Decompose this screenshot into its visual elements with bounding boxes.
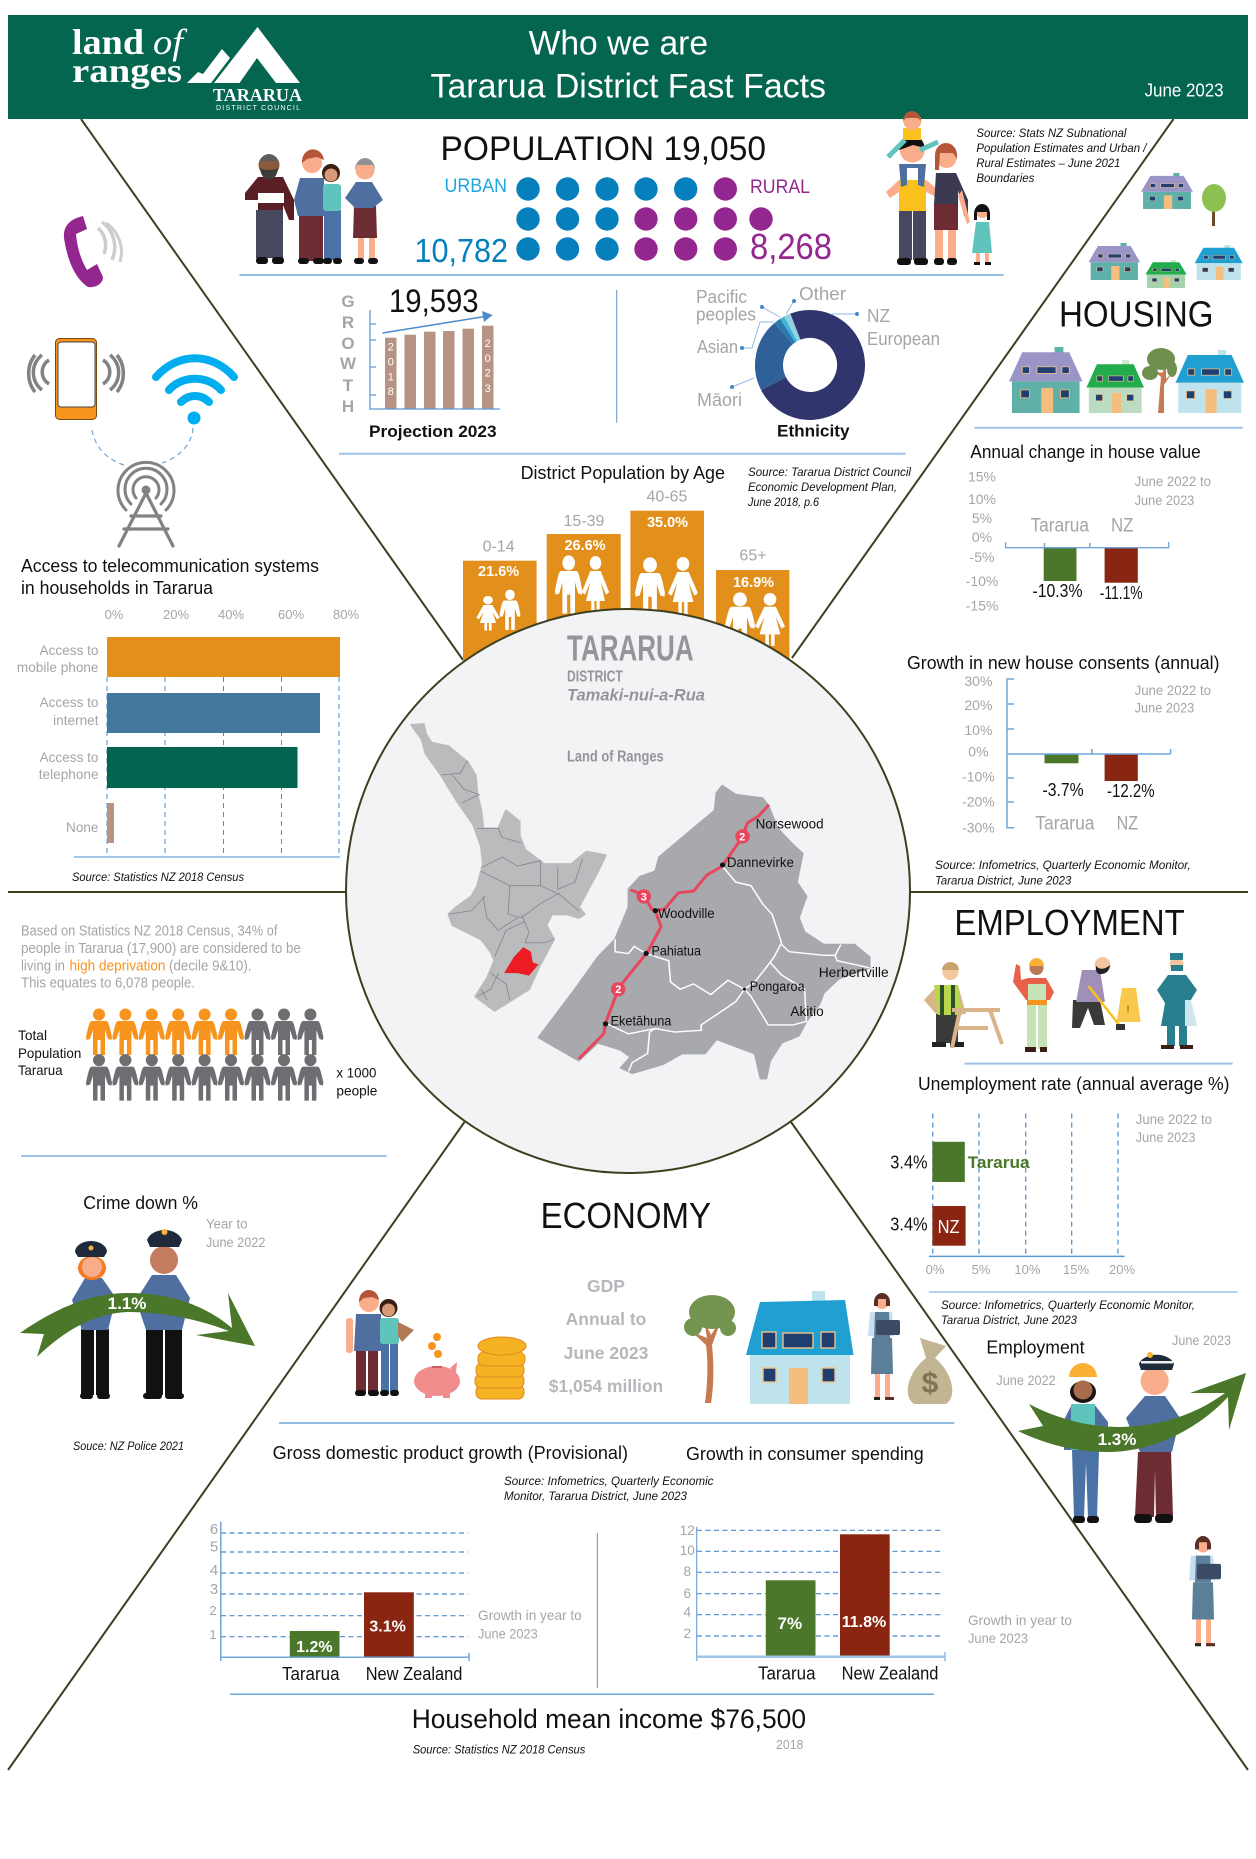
- gdp figure: June 2023: [564, 1343, 649, 1363]
- chart: consumer spending: 12: [680, 1523, 695, 1538]
- chart: consumer spending: Growth in year to: [968, 1612, 1072, 1628]
- vertical label growth: [340, 292, 357, 416]
- chart: growth in new house consents: NZ: [1117, 813, 1138, 834]
- chart: unemployment rate: 20%: [1109, 1262, 1135, 1277]
- caption: Ethnicity: [777, 422, 850, 441]
- projected number: 19,593: [389, 283, 479, 319]
- age percentages: 26.6%: [564, 538, 606, 554]
- chart: unemployment rate: NZ: [938, 1217, 960, 1237]
- chart: consumer spending: Tararua: [758, 1663, 816, 1683]
- chart: unemployment rate: 3.4%: [890, 1153, 928, 1173]
- labels: Māori: [697, 390, 742, 410]
- connection dashes: [92, 428, 193, 465]
- chart: growth in new house consents: -12.2%: [1107, 781, 1155, 801]
- chart: consumer spending: 11.8%: [842, 1614, 886, 1631]
- bars: [385, 326, 494, 409]
- town labels: Herbertville: [819, 964, 889, 980]
- chart: annual change in house value: Tararua: [1030, 516, 1089, 537]
- chart: annual change in house value: [966, 442, 1211, 614]
- title: Tararua District Fast Facts: [430, 68, 826, 106]
- logo: land of ranges: [72, 22, 302, 112]
- arrow: employment up: [1018, 1373, 1246, 1452]
- chart: annual change in house value: -5%: [970, 549, 994, 565]
- chart: annual change in house value: June 2022 to: [1135, 473, 1211, 489]
- bar year labels: 1: [388, 372, 394, 384]
- chart: gdp growth: 4: [210, 1562, 218, 1579]
- heading: Crime down %: [83, 1193, 198, 1213]
- rural label: RURAL: [750, 177, 810, 198]
- chart: growth in new house consents: June 2022 to: [1135, 682, 1211, 698]
- chart: gdp growth: [209, 1443, 628, 1684]
- icons: people silhouettes: [476, 555, 785, 646]
- road shield numbers: 2: [615, 984, 621, 996]
- panel: ethnicity donut: [696, 284, 940, 441]
- rural number: 8,268: [750, 226, 832, 267]
- labels: peoples: [696, 305, 756, 325]
- bar labels: telephone: [39, 767, 98, 782]
- axis labels: 80%: [333, 607, 359, 622]
- panel: employment: [890, 902, 1246, 1646]
- chart: unemployment rate: 3.4%: [890, 1214, 928, 1234]
- illustration: businesswoman: [868, 1293, 900, 1400]
- panel: deprivation: [18, 924, 386, 1156]
- panel: economy: [209, 1195, 1072, 1756]
- heading: EMPLOYMENT: [954, 902, 1185, 943]
- chart: gdp growth: 5: [210, 1539, 218, 1556]
- vertical label growth: T: [343, 376, 354, 395]
- text block: Based on Statistics NZ 2018 Census, 34% of: [21, 924, 278, 940]
- chart: gdp growth: Tararua: [282, 1664, 340, 1684]
- donut chart: [769, 324, 851, 406]
- heading: [21, 556, 319, 598]
- illustration: parents and children: [886, 111, 992, 265]
- labels: Other: [799, 284, 846, 304]
- bar labels: internet: [53, 713, 99, 728]
- pictogram label: [18, 1027, 81, 1078]
- chart: growth in new house consents: Growth in new house consents (annual): [907, 653, 1220, 673]
- chart: gdp growth: Growth in year to: [478, 1607, 582, 1623]
- period: June 2022: [206, 1234, 266, 1250]
- chart: unemployment rate: Tararua: [968, 1153, 1030, 1172]
- source: Rural Estimates – June 2021: [976, 158, 1120, 170]
- chart: growth in new house consents: June 2023: [1135, 700, 1194, 716]
- chart: unemployment rate: 0%: [926, 1262, 945, 1277]
- text block: (decile 9&10).: [169, 959, 252, 975]
- town labels: Akitio: [790, 1003, 824, 1019]
- source: Monitor, Tararua District, June 2023: [504, 1491, 688, 1503]
- age percentages: 35.0%: [647, 515, 688, 531]
- period labels: [996, 1332, 1231, 1388]
- bar labels: mobile phone: [17, 660, 98, 675]
- chart: consumer spending: [680, 1444, 1072, 1683]
- age range labels: 40-65: [647, 489, 688, 506]
- period labels: June 2023: [1172, 1332, 1231, 1348]
- road shield numbers: 2: [739, 832, 745, 844]
- pictogram label: Population: [18, 1045, 81, 1061]
- chart: unemployment rate: June 2023: [1136, 1129, 1196, 1145]
- caption: Projection 2023: [369, 422, 497, 441]
- map: north island: [412, 724, 606, 1011]
- axis labels: 0%: [105, 607, 124, 622]
- age range labels: 15-39: [564, 513, 605, 530]
- chart: unemployment rate: Unemployment rate (annual average %): [918, 1074, 1230, 1094]
- age percentages: 21.6%: [478, 564, 519, 580]
- chart: growth in new house consents: -20%: [962, 794, 995, 810]
- illustration: tree: [684, 1295, 736, 1403]
- chart: consumer spending: Growth in consumer spending: [686, 1444, 924, 1464]
- chart: growth in new house consents: -10%: [962, 769, 995, 785]
- icon: tower: [118, 462, 174, 546]
- arrow: growth trend: [382, 311, 493, 333]
- bar chart: [74, 637, 340, 857]
- road shield numbers: 3: [641, 892, 647, 904]
- worker: cleaner: [1072, 957, 1141, 1030]
- chart: growth in new house consents: 10%: [964, 722, 992, 738]
- text block: high deprivation: [70, 959, 166, 975]
- text block: people in Tararua (17,900) are considered to be: [21, 941, 301, 957]
- panel: telecommunications: [17, 216, 359, 884]
- chart: annual change in house value: 10%: [968, 491, 996, 507]
- gdp figure: [549, 1276, 663, 1396]
- vertical label growth: O: [341, 334, 355, 353]
- title: [430, 24, 826, 106]
- employment heading: Employment: [986, 1338, 1084, 1358]
- town labels: Pongaroa: [750, 978, 805, 994]
- chart: annual change in house value: -10.3%: [1032, 581, 1082, 601]
- chart: growth in new house consents: Tararua: [1035, 813, 1095, 834]
- age percentages: [478, 515, 774, 591]
- title: Who we are: [529, 24, 708, 62]
- bar year labels: 2: [485, 368, 491, 380]
- chart: gdp growth: June 2023: [478, 1625, 538, 1641]
- bar year labels: 3: [485, 383, 491, 395]
- chart: consumer spending: June 2023: [968, 1630, 1028, 1646]
- chart: consumer spending: 10: [680, 1543, 695, 1558]
- illustration: small houses: [1089, 173, 1243, 288]
- panel: growth chart: [340, 283, 500, 441]
- map: tararua district: [539, 786, 870, 1079]
- chart: gdp growth: 1: [209, 1627, 217, 1642]
- chart: annual change in house value: -15%: [966, 598, 998, 614]
- leader lines: [730, 299, 859, 389]
- chart: consumer spending: 4: [684, 1605, 692, 1620]
- period: [206, 1216, 266, 1250]
- source: [504, 1476, 714, 1503]
- source: Tararua District, June 2023: [935, 875, 1072, 887]
- labels: Asian: [697, 337, 738, 357]
- illustration: small businesswoman: [1189, 1536, 1221, 1646]
- panel: crime: [20, 1193, 266, 1453]
- age range labels: [483, 489, 767, 565]
- age range labels: 0-14: [483, 539, 515, 556]
- icon: money bag: [908, 1338, 952, 1404]
- icon: money bag: $: [922, 1367, 939, 1400]
- illustration: large houses: [1009, 347, 1244, 413]
- arrow: crime down: [20, 1293, 255, 1357]
- value: 1.1%: [108, 1294, 146, 1313]
- household income: Household mean income $76,500: [412, 1704, 806, 1734]
- source: Source: Tararua District Council: [748, 467, 911, 479]
- worker: doctor: [1157, 953, 1197, 1049]
- chart: annual change in house value: NZ: [1111, 516, 1134, 537]
- heading: ECONOMY: [541, 1195, 711, 1236]
- unit label: people: [336, 1083, 378, 1099]
- icon: purple phone: [64, 216, 121, 287]
- icon: piggy bank: [414, 1333, 460, 1398]
- text block: [21, 924, 301, 992]
- logo: land of ranges: land: [72, 22, 144, 62]
- gdp figure: GDP: [587, 1276, 625, 1296]
- logo: land of ranges: ranges: [72, 53, 182, 90]
- chart: growth in new house consents: [907, 653, 1220, 835]
- age percentages: 16.9%: [733, 575, 774, 591]
- urban number: 10,782: [414, 232, 508, 269]
- district title: Land of Ranges: [567, 748, 664, 765]
- worker: cleaner: !: [1126, 1004, 1130, 1016]
- chart: annual change in house value: June 2023: [1135, 492, 1194, 508]
- chart: unemployment rate: 10%: [1014, 1262, 1041, 1277]
- chart: growth in new house consents: 30%: [964, 673, 992, 689]
- heading: POPULATION 19,050: [440, 130, 766, 168]
- chart: annual change in house value: 15%: [968, 469, 996, 485]
- unit label: x 1000: [336, 1064, 377, 1080]
- chart: unemployment rate: 5%: [972, 1262, 991, 1277]
- town labels: Eketāhuna: [610, 1013, 672, 1029]
- district title: [567, 628, 705, 765]
- source: Source: Infometrics, Quarterly Economic: [504, 1476, 714, 1488]
- chart: annual change in house value: 0%: [972, 529, 992, 545]
- chart: gdp growth: 6: [210, 1521, 218, 1538]
- pictogram label: Tararua: [18, 1062, 63, 1078]
- vertical label growth: G: [341, 292, 355, 311]
- age range labels: 65+: [739, 548, 767, 565]
- source: Tararua District, June 2023: [941, 1315, 1078, 1327]
- bar labels: None: [66, 820, 98, 835]
- urban label: URBAN: [444, 176, 507, 197]
- bar year labels: 0: [388, 357, 394, 369]
- bar year labels: [388, 338, 491, 398]
- gdp figure: Annual to: [566, 1309, 646, 1329]
- logo: land of ranges: DISTRICT COUNCIL: [216, 105, 300, 112]
- bar labels: Access to: [40, 643, 98, 658]
- illustration: police officers: [72, 1229, 190, 1399]
- district title: DISTRICT: [567, 668, 623, 685]
- road shield numbers: [615, 832, 745, 996]
- unit label: [336, 1064, 378, 1099]
- date: June 2023: [1145, 81, 1224, 101]
- source: [976, 128, 1148, 185]
- source: [941, 1300, 1195, 1327]
- labels: Pacific: [696, 287, 747, 307]
- bar labels: Access to: [40, 750, 98, 765]
- chart: gdp growth: 3.1%: [369, 1619, 406, 1636]
- heading: in households in Tararua: [21, 578, 214, 598]
- chart: growth in new house consents: -3.7%: [1042, 780, 1084, 800]
- source: June 2018, p.6: [747, 497, 820, 509]
- bar labels: [17, 643, 99, 835]
- source: Source: Statistics NZ 2018 Census: [413, 1744, 586, 1756]
- panel: population: [240, 111, 1148, 275]
- illustration: blue house: [746, 1291, 854, 1404]
- bar labels: Access to: [40, 695, 98, 710]
- chart: consumer spending: 6: [684, 1586, 691, 1601]
- labels: NZ: [867, 306, 890, 326]
- bar year labels: 0: [485, 353, 491, 365]
- chart: unemployment rate: June 2022 to: [1136, 1111, 1212, 1127]
- dot chart: urban and rural: [516, 177, 773, 261]
- chart: consumer spending: 2: [684, 1626, 691, 1641]
- chart: consumer spending: New Zealand: [842, 1663, 938, 1683]
- chart: annual change in house value: 5%: [972, 510, 992, 526]
- vertical label growth: W: [340, 354, 357, 373]
- header banner: [8, 15, 1248, 119]
- source: Source: Stats NZ Subnational: [976, 128, 1127, 140]
- age bars: [463, 511, 789, 671]
- gdp figure: $1,054 million: [549, 1376, 663, 1396]
- town labels: Woodville: [658, 905, 715, 921]
- heading: Access to telecommunication systems: [21, 556, 319, 576]
- source: [935, 860, 1191, 887]
- source: Source: Statistics NZ 2018 Census: [72, 870, 244, 884]
- worker: carpenter: [924, 962, 1002, 1048]
- chart: consumer spending: 8: [684, 1564, 691, 1579]
- axis labels: 40%: [218, 607, 244, 622]
- chart: unemployment rate: [890, 1074, 1230, 1277]
- axis labels: 20%: [163, 607, 189, 622]
- icon: mobile phone: [29, 338, 123, 420]
- panel: central map circle: [346, 609, 910, 1173]
- panel: population by age: [463, 463, 911, 671]
- chart: annual change in house value: -11.1%: [1100, 583, 1143, 603]
- axis labels: 60%: [278, 607, 304, 622]
- period: Year to: [206, 1216, 248, 1232]
- chart: gdp growth: 2: [209, 1603, 217, 1618]
- chart: consumer spending: 7%: [778, 1614, 802, 1633]
- source: Souce: NZ Police 2021: [73, 1441, 184, 1453]
- chart: gdp growth: New Zealand: [366, 1664, 462, 1684]
- illustration: workers: [924, 953, 1197, 1052]
- logo: land of ranges: of: [153, 22, 188, 62]
- chart: annual change in house value: -10%: [966, 573, 998, 589]
- town labels: Dannevirke: [727, 854, 794, 870]
- heading: District Population by Age: [521, 463, 725, 483]
- source: Boundaries: [976, 173, 1035, 185]
- labels: [696, 284, 940, 410]
- source: Economic Development Plan,: [748, 482, 897, 494]
- district title: Tamaki-nui-a-Rua: [567, 686, 705, 705]
- logo: land of ranges: TARARUA: [213, 85, 302, 105]
- bar year labels: 8: [388, 386, 394, 398]
- text block: living in: [21, 959, 65, 975]
- chart: gdp growth: 3: [210, 1581, 218, 1598]
- chart: growth in new house consents: -30%: [962, 819, 995, 835]
- chart: growth in new house consents: 0%: [968, 744, 989, 760]
- source: Population Estimates and Urban /: [976, 143, 1148, 155]
- icon: coins: [475, 1337, 526, 1399]
- bar year labels: 2: [485, 338, 491, 350]
- illustration: couple: [346, 1290, 414, 1396]
- source: [747, 467, 911, 509]
- period labels: June 2022: [996, 1372, 1056, 1388]
- illustration: family group: [245, 149, 383, 264]
- bar year labels: 2: [388, 342, 394, 354]
- chart: gdp growth: Gross domestic product growth (Provisional): [273, 1443, 628, 1463]
- chart: growth in new house consents: 20%: [964, 697, 992, 713]
- labels: European: [867, 329, 940, 349]
- source: Source: Infometrics, Quarterly Economic Monitor,: [935, 860, 1191, 872]
- icon: wifi: [156, 358, 234, 424]
- chart: annual change in house value: Annual change in house value: [970, 442, 1201, 462]
- illustration: employed people: [1064, 1352, 1180, 1523]
- panel: housing: [907, 173, 1244, 887]
- source: Source: Infometrics, Quarterly Economic Monitor,: [941, 1300, 1195, 1312]
- text block: This equates to 6,078 people.: [21, 976, 195, 992]
- town labels: Pahiatua: [652, 942, 701, 958]
- vertical label growth: H: [342, 397, 354, 416]
- town labels: Norsewood: [756, 816, 824, 832]
- pictogram: people: [86, 1008, 323, 1101]
- town labels: [610, 816, 889, 1029]
- heading: HOUSING: [1059, 294, 1214, 335]
- pictogram label: Total: [18, 1027, 47, 1043]
- axis labels: [105, 607, 359, 622]
- income year: 2018: [776, 1737, 803, 1752]
- chart: gdp growth: 1.2%: [296, 1639, 333, 1656]
- district title: TARARUA: [567, 628, 694, 669]
- chart: unemployment rate: 15%: [1063, 1262, 1089, 1277]
- value: 1.3%: [1098, 1430, 1136, 1449]
- vertical label growth: R: [342, 313, 354, 332]
- worker: engineer: [1013, 958, 1054, 1052]
